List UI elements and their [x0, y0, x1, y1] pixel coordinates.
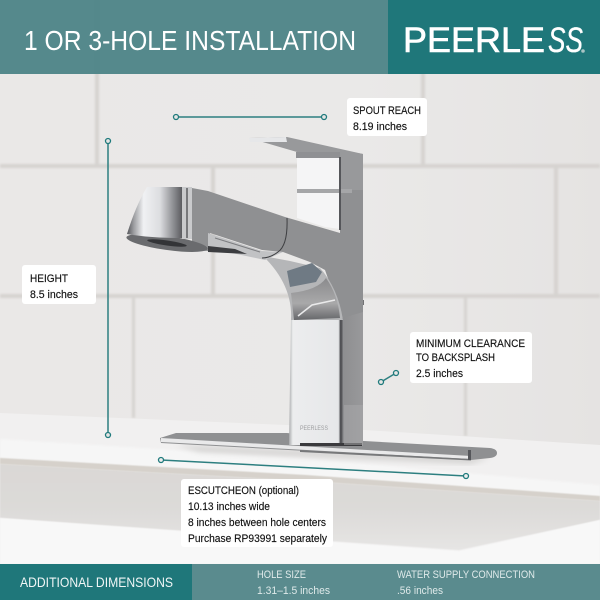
label: height: HEIGHT [30, 273, 68, 285]
logo dot [581, 49, 585, 53]
faucet column [289, 150, 364, 446]
header band: title panel [0, 0, 388, 74]
water supply connection: .56 inches [397, 585, 443, 597]
hole size [257, 569, 330, 597]
handle lever [249, 137, 363, 230]
footer: dimensions panel [192, 564, 600, 600]
dimension: height [22, 138, 110, 438]
label: escutcheon: Purchase RP93991 separately [188, 533, 327, 545]
label: escutcheon: 8 inches between hole centers [188, 517, 326, 529]
dimension: minimum clearance [378, 332, 532, 384]
hole size: HOLE SIZE [257, 569, 306, 581]
header band: logo panel [388, 0, 600, 74]
label: height: 8.5 inches [30, 289, 78, 301]
label: escutcheon: ESCUTCHEON (optional) [188, 485, 299, 497]
logo wordmark: PEERLE [403, 21, 545, 60]
title: 1 OR 3-HOLE INSTALLATION [24, 25, 356, 56]
label: minimum clearance [410, 332, 532, 383]
water supply connection: WATER SUPPLY CONNECTION [397, 569, 535, 581]
label: height [22, 265, 96, 304]
label: escutcheon: 10.13 inches wide [188, 501, 270, 513]
water supply connection [397, 569, 535, 597]
label: spout reach: SPOUT REACH [353, 105, 421, 117]
logo italic letters: SS [548, 21, 583, 60]
spout body [192, 188, 363, 318]
label: spout reach [347, 98, 427, 136]
label: spout reach: 8.19 inches [353, 121, 407, 133]
dimension: spout reach [174, 98, 427, 136]
label: minimum clearance: 2.5 inches [416, 368, 463, 380]
faucet [125, 137, 497, 460]
hose and neck detail [208, 218, 343, 320]
footer: additional dimensions heading [0, 564, 192, 600]
spray head [125, 187, 209, 256]
deck plate escutcheon [160, 433, 497, 460]
label: minimum clearance: TO BACKSPLASH [416, 352, 495, 364]
faucet column: PEERLESS [300, 426, 328, 432]
dimension: escutcheon [158, 458, 468, 547]
hole size: 1.31–1.5 inches [257, 585, 330, 597]
footer: additional dimensions heading: ADDITIONAL DIMENSIONS [20, 574, 173, 590]
label: minimum clearance: MINIMUM CLEARANCE [416, 338, 525, 350]
label: escutcheon [181, 479, 333, 547]
